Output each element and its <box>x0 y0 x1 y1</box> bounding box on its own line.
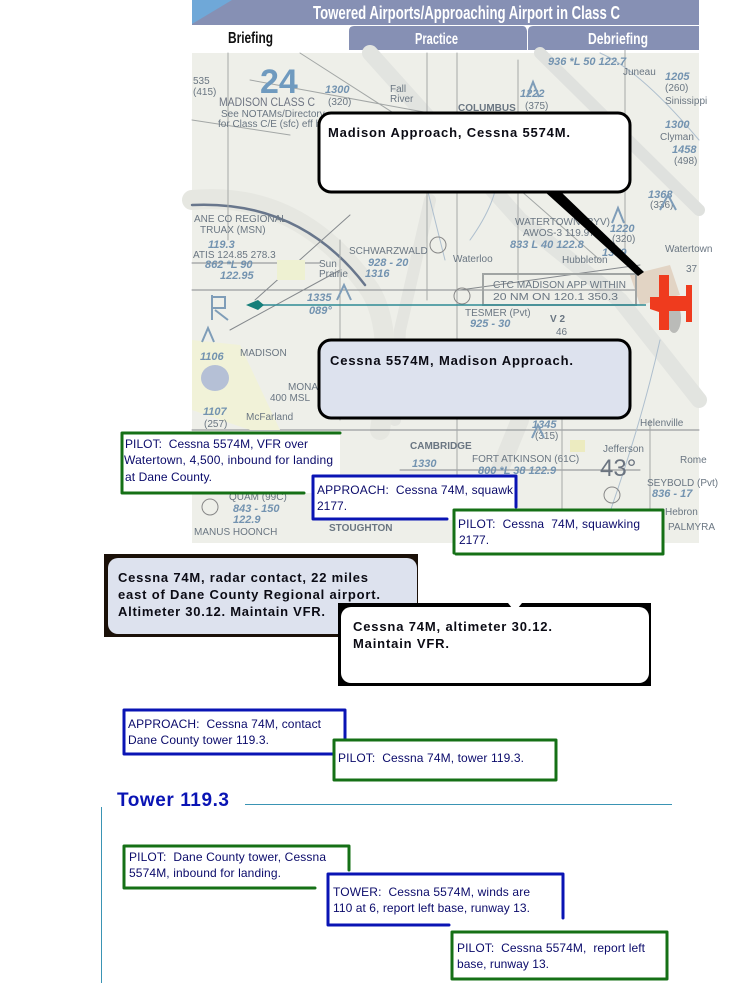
map labels: Sun <box>319 259 337 270</box>
map labels: 119.3 <box>208 239 235 251</box>
pilot box: squawking 2177: PILOT: Cessna 74M, squawking <box>458 517 640 531</box>
map labels: 800 *L 38 122.9 <box>478 465 557 477</box>
pilot box: VFR over Watertown: PILOT: Cessna 5574M, VFR over <box>125 437 308 451</box>
pilot box: VFR over Watertown <box>122 433 340 493</box>
map labels: 1205 <box>665 71 690 83</box>
speech bubble: Madison Approach call: Madison Approach, Cessna 5574M. <box>328 125 570 140</box>
map labels: Jefferson <box>603 444 644 455</box>
map labels: 836 - 17 <box>652 488 693 500</box>
map labels: (320) <box>328 97 351 108</box>
map labels: CTC MADISON APP WITHIN <box>493 280 626 291</box>
map labels: 1106 <box>200 351 225 363</box>
navigation tabs <box>192 25 699 50</box>
speech bubble: radar contact: Altimeter 30.12. Maintain VFR. <box>118 604 325 619</box>
map labels: (320) <box>612 234 635 245</box>
map labels: 089° <box>309 305 332 317</box>
map labels: SCHWARZWALD <box>349 246 428 257</box>
header title: Towered Airports/Approaching Airport in Class C <box>313 3 620 23</box>
approach box: contact tower <box>124 710 345 754</box>
map labels: Juneau <box>623 67 656 78</box>
pilot box: squawking 2177: 2177. <box>459 533 489 547</box>
map labels: 1300 <box>325 84 350 96</box>
map labels: 1316 <box>365 268 390 280</box>
map labels: COLUMBUS <box>458 103 516 114</box>
map labels: Hubbleton <box>562 255 608 266</box>
map labels: 535 <box>193 76 210 87</box>
pilot box: inbound for landing <box>124 846 349 888</box>
map labels: TRUAX (MSN) <box>200 225 266 236</box>
map labels: 20 NM ON 120.1 350.3 <box>493 292 619 303</box>
tower box: winds and left base <box>328 874 563 925</box>
map labels: Sinissippi <box>665 96 707 107</box>
map labels: FORT ATKINSON (61C) <box>472 454 579 465</box>
map labels: River <box>390 94 414 105</box>
map labels: WATERTOWN (RYV) <box>515 217 610 228</box>
map labels: ATIS 124.85 278.3 <box>193 250 276 261</box>
map labels: MANUS HOONCH <box>194 527 277 538</box>
map labels: (260) <box>665 83 688 94</box>
map labels: 1359 <box>602 247 627 259</box>
speech bubble: radar contact: east of Dane County Regional airport. <box>118 587 380 602</box>
map labels: SEYBOLD (Pvt) <box>647 478 718 489</box>
map labels: ANE CO REGIONAL <box>194 214 287 225</box>
map labels: (375) <box>525 101 548 112</box>
speech bubble: altimeter readback: Maintain VFR. <box>353 636 449 651</box>
map labels: AWOS-3 119.97 <box>523 228 595 239</box>
map labels: CAMBRIDGE <box>410 441 472 452</box>
map labels: (315) <box>535 431 558 442</box>
course line to airport <box>246 300 646 310</box>
tab: practice <box>349 26 527 50</box>
map labels: 1222 <box>520 88 544 100</box>
map labels: 1345 <box>532 419 557 431</box>
approach box: contact tower: APPROACH: Cessna 74M, contact <box>128 717 322 731</box>
map labels: 43° <box>600 455 636 482</box>
tab: briefing: Briefing <box>228 30 273 47</box>
header banner <box>192 0 699 25</box>
map labels: Helenville <box>640 418 684 429</box>
pilot box: report left base: PILOT: Cessna 5574M, report left <box>457 941 646 955</box>
map labels: 833 L 40 122.8 <box>510 239 585 251</box>
map tinted areas <box>192 260 680 452</box>
tower box: winds and left base: 110 at 6, report left base, runway 13. <box>333 901 530 915</box>
map labels: 1220 <box>610 223 635 235</box>
map labels: 46 <box>556 327 568 338</box>
CTC Madison notice box <box>483 274 636 305</box>
map labels: 400 MSL <box>270 393 310 404</box>
pilot box: VFR over Watertown: at Dane County. <box>125 470 212 484</box>
pilot box: tower 119.3: PILOT: Cessna 74M, tower 119.3. <box>338 751 524 765</box>
map labels: 24 <box>260 63 298 101</box>
tower section rule <box>102 804 672 983</box>
speech bubble: Approach reply: Cessna 5574M, Madison Approach. <box>330 353 573 368</box>
airport and obstacle symbols <box>202 82 676 515</box>
map labels: MONA <box>288 382 318 393</box>
tab: debriefing <box>528 26 699 50</box>
map labels: QUAM (99C) <box>229 492 287 503</box>
map labels: McFarland <box>246 412 293 423</box>
speech bubble: altimeter readback <box>338 603 651 686</box>
pilot box: report left base <box>452 932 667 979</box>
map labels: Fall <box>390 84 406 95</box>
speech bubble: altimeter readback: Cessna 74M, altimeter 30.12. <box>353 619 552 634</box>
map labels: for Class C/E (sfc) eff hrs <box>218 119 330 130</box>
map labels: Watertown <box>665 244 712 255</box>
map labels: TESMER (Pvt) <box>465 308 531 319</box>
tab: practice: Practice <box>415 31 458 48</box>
speech bubble: Approach reply <box>319 340 630 418</box>
heading: Tower 119.3: Tower 119.3 <box>117 790 229 811</box>
map labels: 122.95 <box>220 270 255 282</box>
map labels: 1300 <box>665 119 690 131</box>
map labels: 843 - 150 <box>233 503 280 515</box>
speech bubble: radar contact: Cessna 74M, radar contact, 22 miles <box>118 570 368 585</box>
sectional chart map <box>192 50 718 543</box>
map labels: PALMYRA <box>668 522 715 533</box>
map labels: 925 - 30 <box>470 318 511 330</box>
map labels: 936 *L 50 122.7 <box>548 56 627 68</box>
map labels: 1330 <box>412 458 437 470</box>
icon: red airplane <box>650 275 692 333</box>
map labels: Prairie <box>319 269 348 280</box>
map labels: MADISON CLASS C <box>219 95 315 109</box>
map labels: See NOTAMs/Directory <box>221 109 325 120</box>
speech bubble: radar contact <box>104 554 418 637</box>
pilot box: squawking 2177 <box>454 510 663 555</box>
tab: debriefing: Debriefing <box>588 31 648 48</box>
tower box: winds and left base: TOWER: Cessna 5574M, winds are <box>333 885 530 899</box>
pilot box: VFR over Watertown: Watertown, 4,500, inbound for landing <box>124 453 333 467</box>
map labels: 928 - 20 <box>368 257 409 269</box>
map labels: 122.9 <box>233 514 261 526</box>
map labels: 1107 <box>203 406 228 418</box>
map labels: (498) <box>674 156 697 167</box>
map labels: MADISON <box>240 348 287 359</box>
pilot box: inbound for landing: PILOT: Dane County tower, Cessna <box>129 850 326 864</box>
map labels: Rome <box>680 455 707 466</box>
map labels: Clyman <box>660 132 694 143</box>
approach box: squawk 2177 <box>313 476 517 520</box>
map labels: STOUGHTON <box>329 523 393 534</box>
map labels: 862 *L 90 <box>205 259 253 271</box>
map labels: V 2 <box>550 314 565 325</box>
speech bubble: Madison Approach call <box>319 113 644 276</box>
map labels: 37 <box>686 264 698 275</box>
map labels: 1368 <box>648 189 673 201</box>
map labels: (257) <box>204 419 227 430</box>
pilot box: tower 119.3 <box>334 740 556 780</box>
map labels: 1335 <box>307 292 332 304</box>
map labels: (336) <box>650 200 673 211</box>
map labels: Hebron <box>665 507 698 518</box>
approach box: squawk 2177: APPROACH: Cessna 74M, squawk <box>317 483 514 497</box>
map labels <box>193 56 718 538</box>
approach box: squawk 2177: 2177. <box>317 499 347 513</box>
map labels: 1458 <box>672 144 697 156</box>
pilot box: inbound for landing: 5574M, inbound for landing. <box>129 866 281 880</box>
map labels: Waterloo <box>453 254 493 265</box>
map labels: (415) <box>193 87 216 98</box>
pilot box: report left base: base, runway 13. <box>457 957 549 971</box>
approach box: contact tower: Dane County tower 119.3. <box>128 733 269 747</box>
